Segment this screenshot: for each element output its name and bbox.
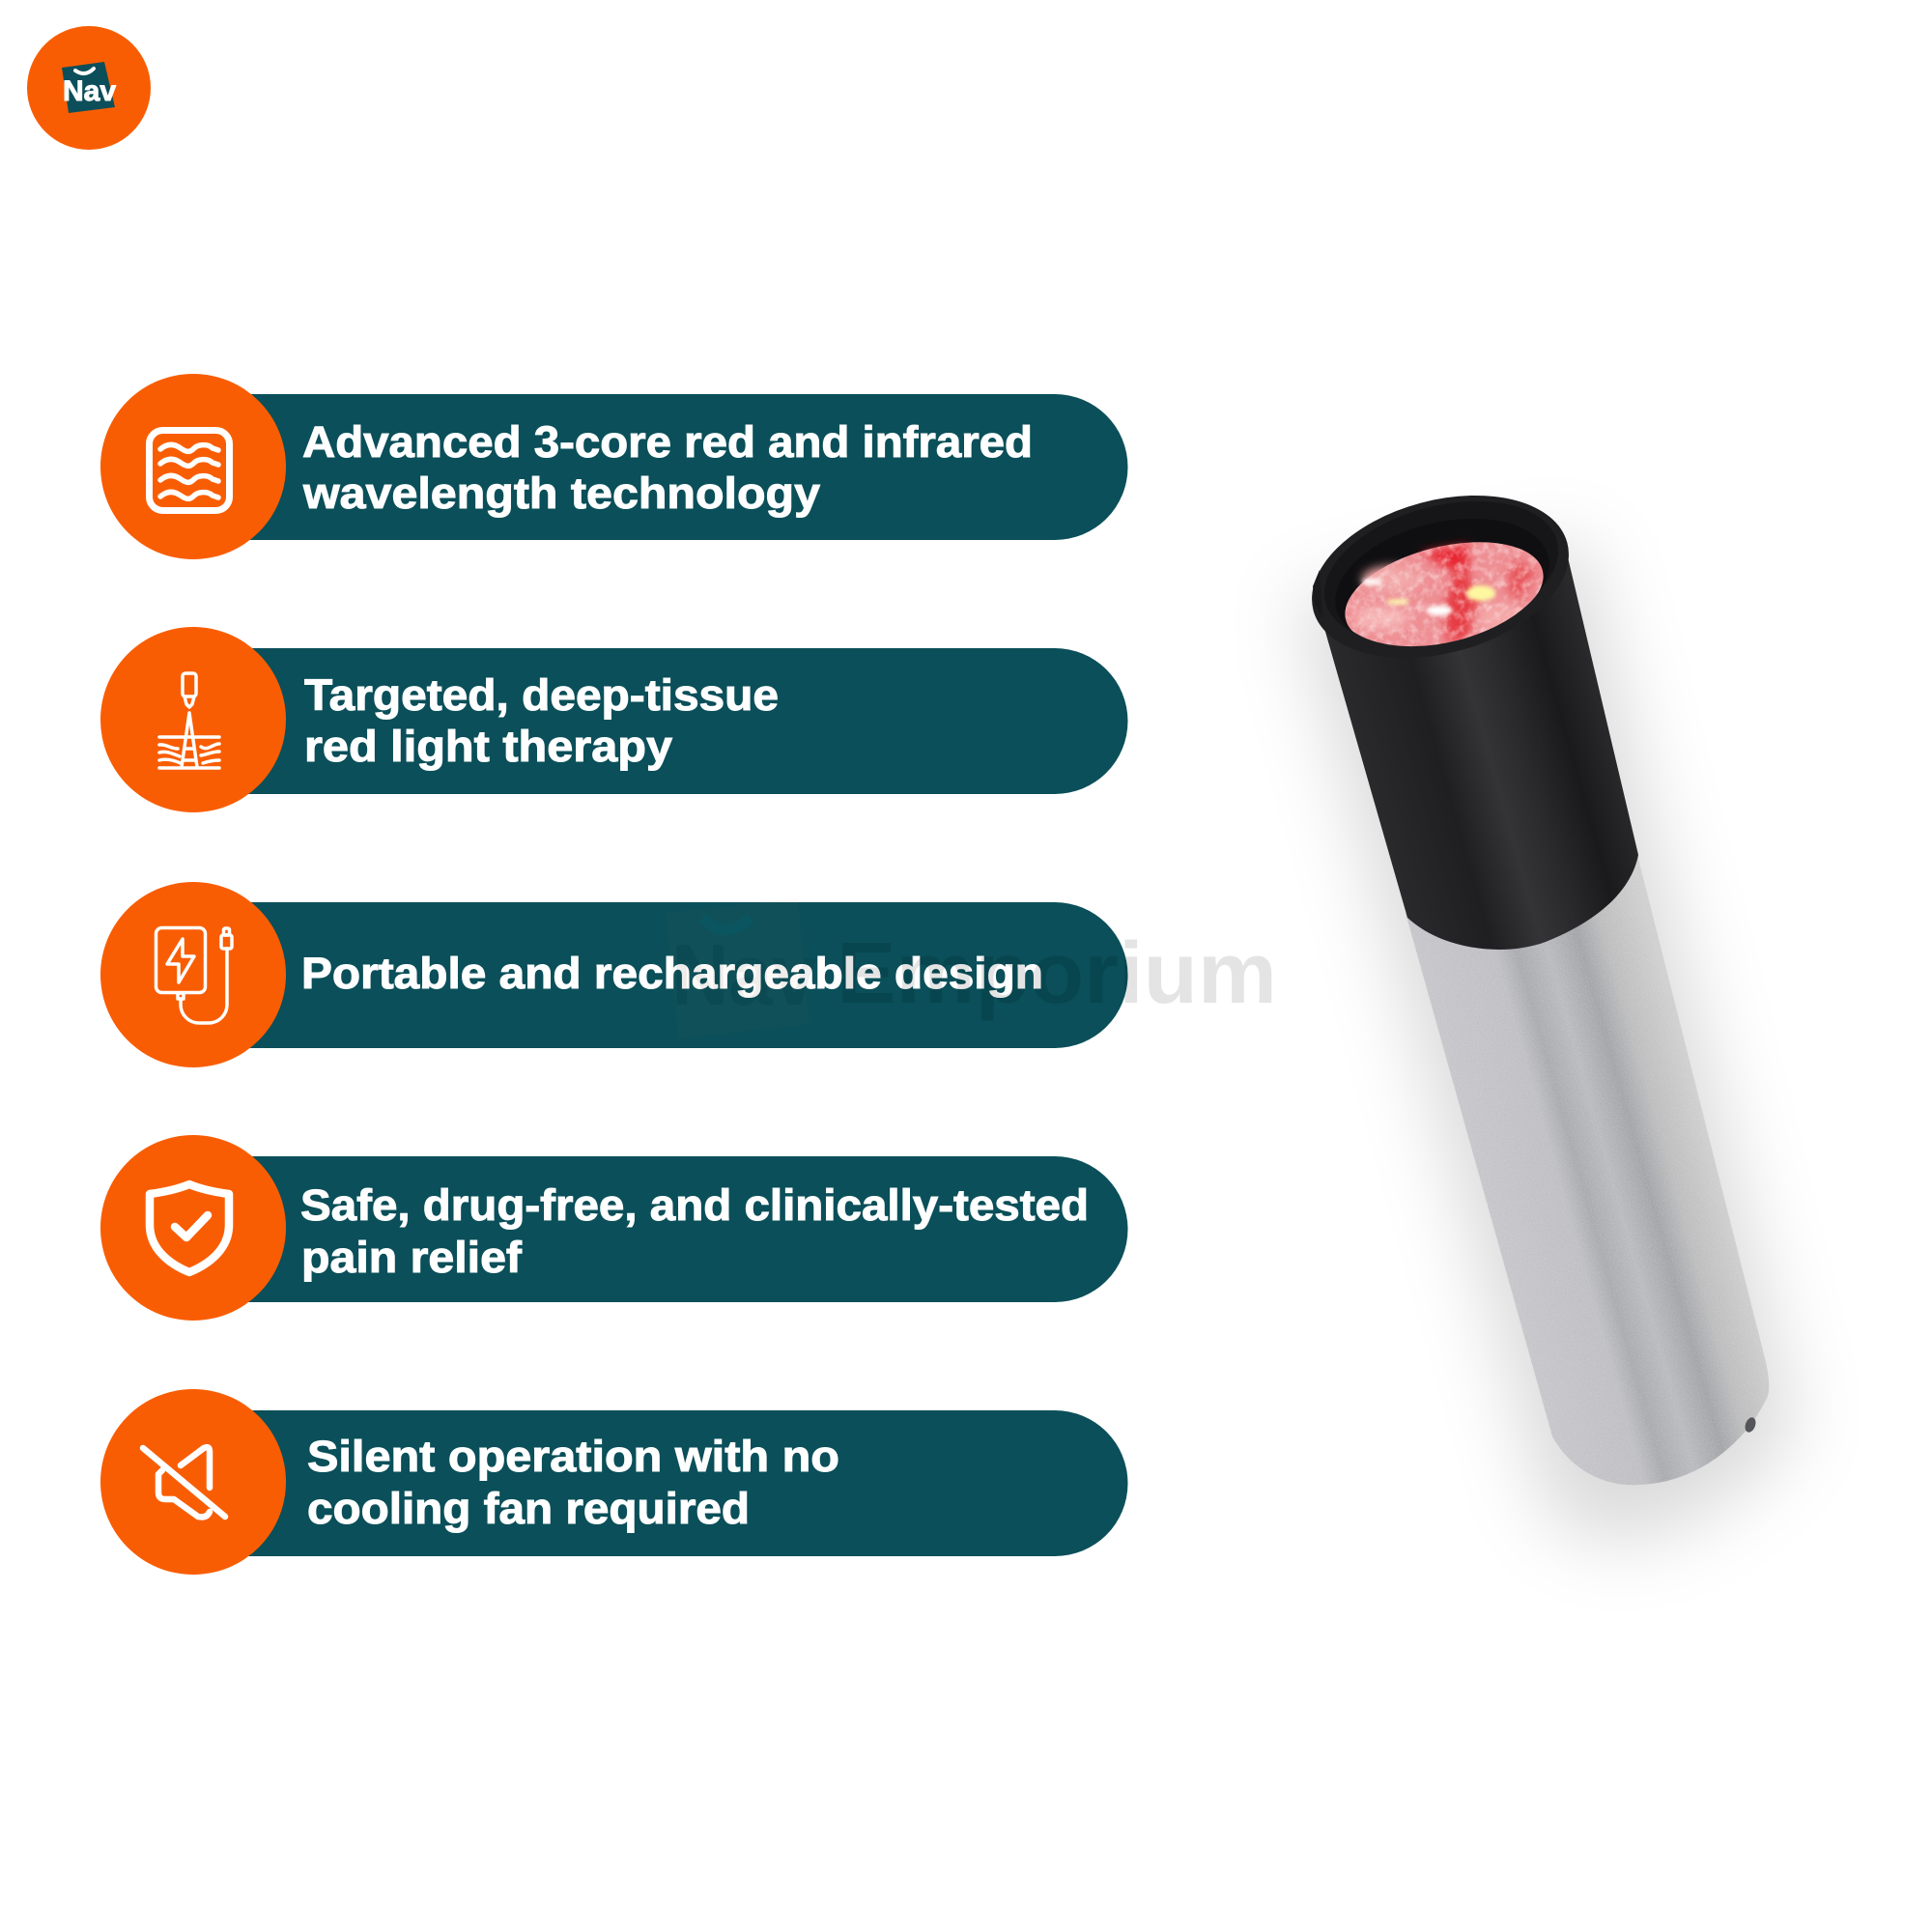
LED lens bbox=[1345, 538, 1544, 647]
feature row 4 bbox=[100, 1135, 1128, 1321]
text: row 4 bbox=[300, 1180, 1089, 1282]
watermark: Nav Emporium: Nav bbox=[671, 927, 816, 1024]
feature row 2 bbox=[100, 627, 1128, 812]
text: row 5: Silent operation with no bbox=[307, 1432, 839, 1481]
watermark: Nav Emporium bbox=[666, 898, 1277, 1038]
icon: power bank bbox=[156, 927, 232, 1023]
logo badge: Nav bbox=[63, 75, 116, 107]
text: row 3: Portable and rechargeable design bbox=[301, 949, 1043, 998]
text: row 1 bbox=[302, 417, 1033, 518]
icon: shield check bbox=[150, 1184, 229, 1272]
feature row 3 bbox=[100, 882, 1128, 1067]
logo badge bbox=[27, 26, 151, 150]
text: row 4: pain relief bbox=[301, 1233, 523, 1282]
text: row 1: wavelength technology bbox=[302, 469, 820, 518]
text: row 5 bbox=[307, 1432, 839, 1533]
text: row 2 bbox=[304, 670, 779, 771]
product: red light therapy device bbox=[1293, 469, 1797, 1541]
text: row 4: Safe, drug-free, and clinically-tested bbox=[300, 1180, 1089, 1230]
feature row 5 bbox=[100, 1389, 1128, 1575]
device shadow bbox=[1294, 541, 1797, 1541]
icon: muted speaker bbox=[143, 1447, 225, 1517]
text: row 2: red light therapy bbox=[304, 722, 672, 771]
text: row 2: Targeted, deep-tissue bbox=[304, 670, 779, 720]
silver body bbox=[1406, 858, 1770, 1486]
text: row 5: cooling fan required bbox=[307, 1484, 750, 1533]
icon: laser on tissue bbox=[159, 673, 219, 768]
watermark: Nav Emporium: Emporium bbox=[837, 925, 1277, 1022]
icon: waves in square bbox=[149, 431, 230, 510]
black head bbox=[1293, 469, 1638, 950]
feature row 1 bbox=[100, 374, 1128, 559]
text: row 1: Advanced 3-core red and infrared bbox=[302, 417, 1033, 467]
